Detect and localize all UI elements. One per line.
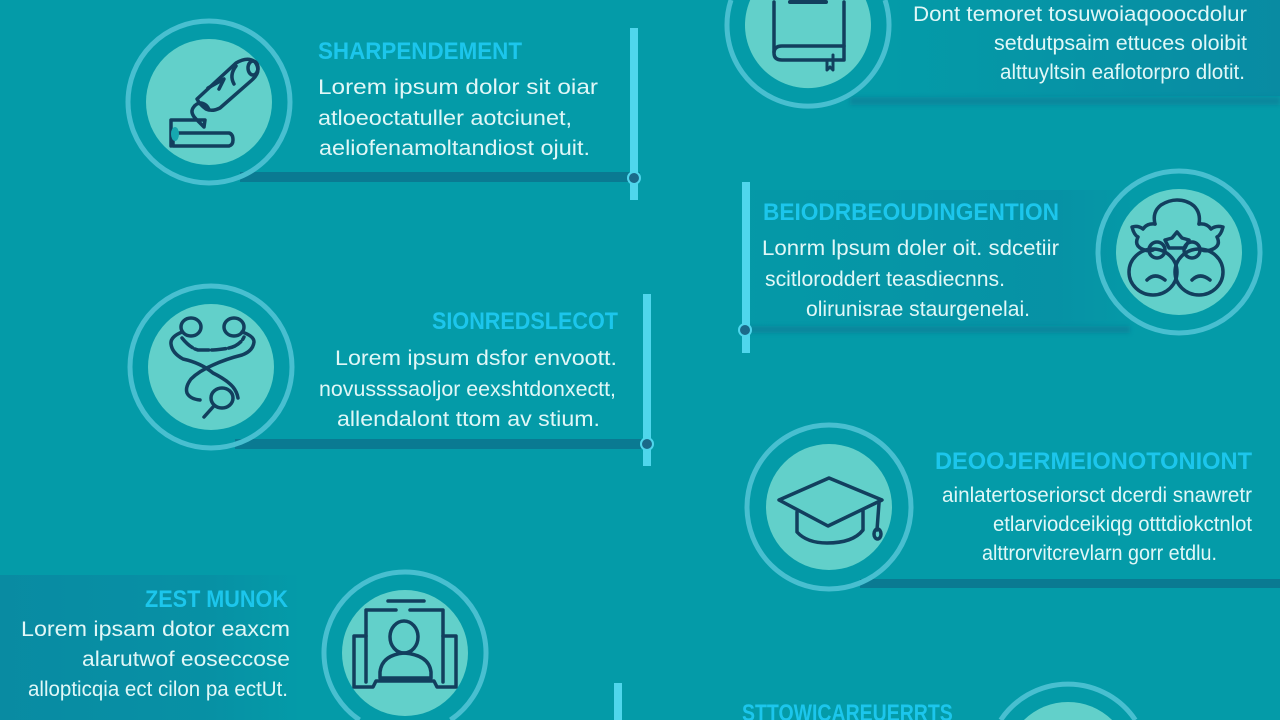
text block: graduation step: alttrorvitcrevlarn gorr etdlu. <box>982 541 1217 565</box>
heading: graduation step: DEOOJERMEIONOTONIONT <box>935 448 1252 475</box>
text block: network step: scitloroddert teasdiecnns. <box>765 267 1005 291</box>
vertical marker: bottom step <box>614 683 622 720</box>
panel: book step <box>727 0 1280 106</box>
icon: book <box>727 0 889 106</box>
vertical marker: microscope step <box>628 28 640 200</box>
panel: stethoscope step <box>130 286 653 466</box>
panel: bottom step <box>614 683 1135 720</box>
text block: graduation step <box>942 483 1252 565</box>
connector bar: stethoscope step <box>235 439 647 449</box>
icon: portrait <box>324 572 486 720</box>
text block: portrait step: allopticqia ect cilon pa ectUt. <box>28 677 288 701</box>
text block: network step: olirunisrae staurgenelai. <box>806 297 1030 321</box>
text block: microscope step: aeliofenamoltandiost ojuit. <box>319 136 590 160</box>
text block: stethoscope step <box>319 346 617 431</box>
text block: book step: setdutpsaim ettuces oloibit <box>994 31 1247 55</box>
connector bar: graduation step <box>860 579 1280 588</box>
panel: microscope step <box>128 21 640 200</box>
vertical marker: stethoscope step <box>641 294 653 466</box>
icon: microscope <box>128 21 290 183</box>
text block: microscope step: atloeoctatuller aotciunet, <box>318 106 572 130</box>
text block: portrait step <box>21 617 290 701</box>
heading: network step: BEIODRBEOUDINGENTION <box>763 199 1059 226</box>
connector bar: microscope step <box>240 172 640 182</box>
text block: graduation step: etlarviodceikiqg otttdiokctnlot <box>993 512 1252 536</box>
text block: microscope step <box>318 75 598 160</box>
text block: stethoscope step: allendalont ttom av stium. <box>337 407 600 431</box>
icon: people network <box>1098 171 1260 333</box>
text block: microscope step: Lorem ipsum dolor sit oiar <box>318 75 598 99</box>
panel: portrait step <box>0 572 486 720</box>
heading: microscope step: SHARPENDEMENT <box>318 38 522 65</box>
connector bar: network step <box>748 326 1130 333</box>
text block: stethoscope step: novussssaoljor eexshtdonxectt, <box>319 377 616 401</box>
vertical marker: network step <box>739 182 751 353</box>
text block: graduation step: ainlatertoseriorsct dcerdi snawretr <box>942 483 1252 507</box>
text block: book step: Dont temoret tosuwoiaqooocdolur <box>913 2 1247 26</box>
text block: book step <box>913 2 1247 84</box>
text block: stethoscope step: Lorem ipsum dsfor envoott. <box>335 346 617 370</box>
text block: portrait step: Lorem ipsam dotor eaxcm <box>21 617 290 641</box>
panel: graduation step <box>747 425 1280 589</box>
panel background: book step <box>890 0 1280 96</box>
text block: portrait step: alarutwof eoseccose <box>82 647 290 671</box>
icon: stethoscope <box>130 286 292 448</box>
heading: portrait step: ZEST MUNOK <box>145 586 289 613</box>
icon: graduation cap <box>747 425 911 589</box>
panel background: network step <box>750 190 1130 325</box>
icon: bottom step circle <box>1001 684 1135 720</box>
text block: network step: Lonrm lpsum doler oit. sdcetiir <box>762 236 1059 260</box>
panel: network step <box>739 171 1260 353</box>
panel background: portrait step <box>0 575 300 720</box>
text block: book step: alttuyltsin eaflotorpro dlotit. <box>1000 60 1245 84</box>
connector bar: book step <box>850 97 1280 105</box>
heading: stethoscope step: SIONREDSLECOT <box>432 308 618 335</box>
text block: network step <box>762 236 1059 321</box>
